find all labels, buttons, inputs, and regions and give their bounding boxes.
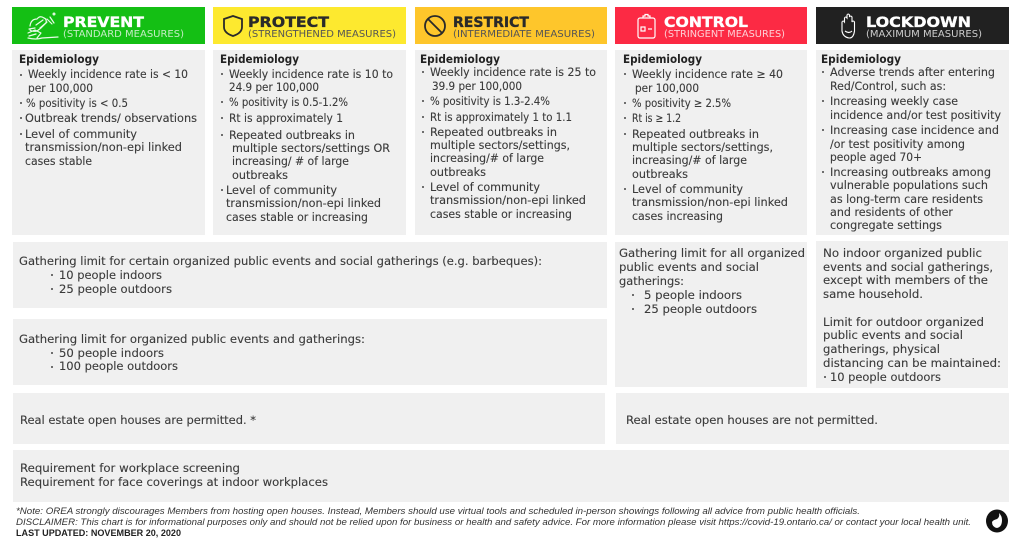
panel: gathering limit for organized events: Gathering limit for organized public events and gatherings: xyxy=(19,332,365,346)
panel: lockdown gathering limit: same household. xyxy=(823,287,923,301)
panel: lockdown epidemiology: Red/Control, such as: xyxy=(830,79,946,93)
panel: restrict epidemiology: increasing/# of large xyxy=(430,151,544,165)
panel: gathering limit for certain events: 10 people indoors xyxy=(59,268,162,282)
panel: control epidemiology: Repeated outbreaks in xyxy=(632,127,759,141)
panel: control epidemiology: Weekly incidence rate ≥ 40 xyxy=(632,67,783,81)
panel: lockdown epidemiology: vulnerable populations such xyxy=(830,178,988,192)
panel: restrict epidemiology: cases stable or increasing xyxy=(430,207,572,221)
panel: workplace requirements: Requirement for workplace screening xyxy=(20,461,240,475)
panel: gathering limit for organized events: 50 people indoors xyxy=(59,346,164,360)
panel: lockdown gathering limit: distancing can be maintained: xyxy=(823,356,1001,370)
panel: lockdown epidemiology: Adverse trends after entering xyxy=(830,65,995,79)
panel: lockdown epidemiology: people aged 70+ xyxy=(830,150,922,164)
panel: lockdown epidemiology: and residents of other xyxy=(830,205,953,219)
panel: restrict epidemiology: 39.9 per 100,000 xyxy=(432,79,522,93)
panel: control epidemiology: % positivity ≥ 2.5% xyxy=(632,96,731,110)
panel: lockdown epidemiology xyxy=(816,50,1009,235)
panel: prevent epidemiology: Weekly incidence rate is < 10 xyxy=(28,67,188,81)
icon: clipboard xyxy=(638,14,655,38)
panel: lockdown gathering limit: Limit for outdoor organized xyxy=(823,315,984,329)
panel: protect epidemiology: Repeated outbreaks in xyxy=(229,128,355,142)
panel: open houses permitted xyxy=(13,393,605,444)
panel: restrict epidemiology: Rt is approximately 1 to 1.1 xyxy=(430,110,572,124)
panel: lockdown gathering limit: events and social gatherings, xyxy=(823,260,993,274)
panel: gathering limit for certain events: 25 people outdoors xyxy=(59,282,172,296)
panel: prevent epidemiology: Epidemiology xyxy=(19,52,99,66)
panel: lockdown epidemiology: Epidemiology xyxy=(821,52,901,66)
panel: control epidemiology: Epidemiology xyxy=(623,52,702,66)
panel: lockdown gathering limit: except with members of the xyxy=(823,273,988,287)
panel: control epidemiology xyxy=(615,50,807,235)
header: restrict xyxy=(415,7,607,44)
panel: protect epidemiology: Rt is approximately 1 xyxy=(229,111,343,125)
header: protect: PROTECT xyxy=(248,15,329,31)
icon: prohibited sign xyxy=(425,16,445,36)
logo xyxy=(986,510,1008,532)
panel: lockdown epidemiology: incidence and/or test positivity xyxy=(830,108,1001,122)
panel: protect epidemiology xyxy=(213,50,406,235)
panel: gathering limit for certain events xyxy=(13,242,607,308)
panel: restrict epidemiology xyxy=(415,50,607,235)
panel: protect epidemiology: Weekly incidence rate is 10 to xyxy=(229,67,393,81)
panel: lockdown epidemiology: Increasing weekly case xyxy=(830,94,958,108)
header: restrict: (INTERMEDIATE MEASURES) xyxy=(453,29,595,40)
panel: protect epidemiology: Epidemiology xyxy=(220,52,299,66)
panel: control gathering limit: Gathering limit for all organized xyxy=(619,246,805,260)
panel: prevent epidemiology: Level of community xyxy=(25,127,137,141)
header: protect: (STRENGTHENED MEASURES) xyxy=(248,29,396,40)
panel: control gathering limit: gatherings: xyxy=(619,274,684,288)
panel: protect epidemiology: increasing/ # of large xyxy=(232,154,349,168)
panel: gathering limit for certain events: Gathering limit for certain organized public events and social gatherings (e.g. barbeques): xyxy=(19,254,542,268)
header: restrict: RESTRICT xyxy=(453,15,529,31)
panel: protect epidemiology: 24.9 per 100,000 xyxy=(229,80,319,94)
header: lockdown xyxy=(816,7,1009,44)
panel: gathering limit for organized events: 100 people outdoors xyxy=(59,359,178,373)
panel: lockdown gathering limit: No indoor organized public xyxy=(823,246,982,260)
panel: control epidemiology: increasing/# of large xyxy=(632,153,747,167)
panel: control epidemiology: transmission/non-epi linked xyxy=(632,195,788,209)
header: lockdown: LOCKDOWN xyxy=(866,15,971,31)
panel: restrict epidemiology: % positivity is 1.3-2.4% xyxy=(430,94,550,108)
header: control: (STRINGENT MEASURES) xyxy=(664,29,785,40)
panel: lockdown gathering limit: 10 people outdoors xyxy=(830,370,941,384)
panel: prevent epidemiology: transmission/non-epi linked xyxy=(25,140,182,154)
header: protect xyxy=(213,7,406,44)
icon: washing hands xyxy=(28,13,58,39)
panel: restrict epidemiology: transmission/non-epi linked xyxy=(430,193,586,207)
panel: control epidemiology: Level of community xyxy=(632,182,743,196)
icon: raised hand xyxy=(842,14,854,38)
panel: control gathering limit xyxy=(615,242,807,387)
header: lockdown: (MAXIMUM MEASURES) xyxy=(866,29,982,40)
panel: control gathering limit: 5 people indoors xyxy=(644,288,742,302)
panel: prevent epidemiology: cases stable xyxy=(25,154,92,168)
header: control: CONTROL xyxy=(664,15,748,31)
panel: control epidemiology: cases increasing xyxy=(632,209,723,223)
panel: control epidemiology: Rt is ≥ 1.2 xyxy=(632,111,681,125)
panel: gathering limit for organized events xyxy=(13,319,607,385)
footer notes: LAST UPDATED: NOVEMBER 20, 2020 xyxy=(16,528,181,538)
panel: workplace requirements xyxy=(13,450,1009,502)
panel: protect epidemiology: % positivity is 0.5-1.2% xyxy=(229,95,348,109)
panel: control epidemiology: outbreaks xyxy=(632,167,688,181)
panel: control epidemiology: multiple sectors/settings, xyxy=(632,140,773,154)
panel: workplace requirements: Requirement for face coverings at indoor workplaces xyxy=(20,475,328,489)
panel: restrict epidemiology: Level of community xyxy=(430,180,540,194)
panel: open houses not permitted xyxy=(616,393,1009,444)
header: control xyxy=(615,7,807,44)
panel: lockdown gathering limit: gatherings, physical xyxy=(823,342,940,356)
panel: prevent epidemiology: per 100,000 xyxy=(28,81,93,95)
panel: open houses not permitted: Real estate open houses are not permitted. xyxy=(626,413,878,427)
panel: control gathering limit: 25 people outdoors xyxy=(644,302,757,316)
icon: shield xyxy=(224,16,242,36)
header: prevent xyxy=(12,7,205,44)
panel: lockdown epidemiology: /or test positivity among xyxy=(830,137,965,151)
panel: control epidemiology: per 100,000 xyxy=(635,81,699,95)
footer notes: DISCLAIMER: This chart is for informational purposes only and should not be relied upon for business or health and safety advice. For more information please visit https://covid-19.ontario.ca/ or contact your local health unit. xyxy=(16,517,971,527)
panel: prevent epidemiology: % positivity is < 0.5 xyxy=(26,96,128,110)
panel: lockdown gathering limit: public events and social xyxy=(823,328,963,342)
panel: prevent epidemiology: Outbreak trends/ observations xyxy=(25,111,197,125)
panel: prevent epidemiology xyxy=(12,50,205,235)
panel: restrict epidemiology: Repeated outbreaks in xyxy=(430,125,557,139)
panel: lockdown epidemiology: Increasing outbreaks among xyxy=(830,165,991,179)
panel: protect epidemiology: transmission/non-epi linked xyxy=(226,196,381,210)
panel: restrict epidemiology: multiple sectors/settings, xyxy=(430,138,570,152)
panel: protect epidemiology: multiple sectors/settings OR xyxy=(232,141,390,155)
panel: lockdown gathering limit xyxy=(816,241,1008,388)
footer notes: *Note: OREA strongly discourages Members from hosting open houses. Instead, Members should use virtual tools and scheduled in-person showings following all advice from public health officials. xyxy=(16,506,860,516)
panel: open houses permitted: Real estate open houses are permitted. * xyxy=(20,413,256,427)
panel: lockdown epidemiology: congregate settings xyxy=(830,218,942,232)
panel: protect epidemiology: Level of community xyxy=(226,183,337,197)
panel: lockdown epidemiology: as long-term care residents xyxy=(830,192,983,206)
panel: control gathering limit: public events and social xyxy=(619,260,759,274)
header: prevent: PREVENT xyxy=(63,15,144,31)
panel: protect epidemiology: cases stable or increasing xyxy=(226,210,368,224)
panel: restrict epidemiology: Weekly incidence rate is 25 to xyxy=(430,65,596,79)
footer notes xyxy=(16,506,971,538)
panel: lockdown epidemiology: Increasing case incidence and xyxy=(830,123,999,137)
panel: protect epidemiology: outbreaks xyxy=(232,168,288,182)
header: prevent: (STANDARD MEASURES) xyxy=(63,29,184,40)
panel: restrict epidemiology: outbreaks xyxy=(430,165,486,179)
panel: restrict epidemiology: Epidemiology xyxy=(420,52,500,66)
